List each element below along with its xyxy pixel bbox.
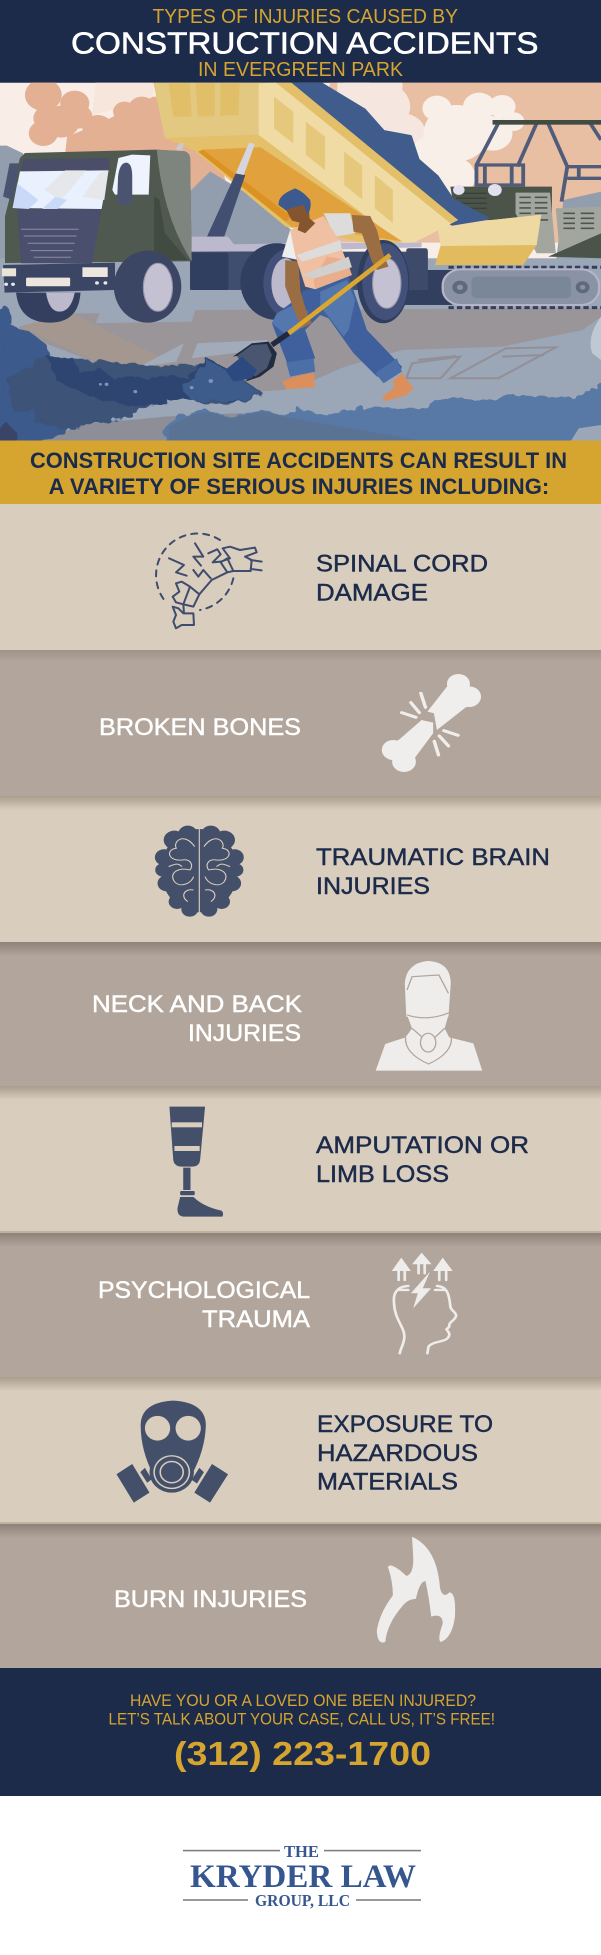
lower ground shadow [43,413,284,440]
panel: spinal cord damage: DAMAGE [316,580,428,606]
panel: neck and back injuries: INJURIES [188,1020,301,1047]
excavator [402,120,601,308]
gold subheading band [0,440,601,504]
panel: broken bones [0,650,601,796]
label: PSYCHOLOGICAL [98,1277,310,1304]
icon: spine [156,534,262,628]
label: BROKEN BONES [99,714,301,741]
foreground dirt: left [0,310,261,441]
clouds: left peach [25,79,230,197]
safety vest [290,216,352,289]
truck cab [2,150,192,293]
call to action banner: LET’S TALK ABOUT YOUR CASE, CALL US, IT’S FREE! [108,1710,495,1728]
label: TRAUMATIC BRAIN [316,844,550,871]
clouds: right sky [330,77,601,243]
logo: The Kryder Law Group: THE [284,1842,319,1861]
trousers [272,277,402,377]
icon: brain [155,826,244,917]
main title: CONSTRUCTION ACCIDENTS [71,26,538,60]
head [286,205,316,234]
dump truck bed [153,83,458,247]
worker with shovel [225,188,414,402]
ground shadow [19,308,601,393]
header banner [0,0,601,83]
icon: head with stress arrows [392,1253,456,1353]
call to action text: HAVE YOU OR A LOVED ONE BEEN INJURED? [130,1691,476,1710]
panel: amputation or limb loss: LIMB LOSS [316,1161,449,1188]
hydraulic ram [176,143,255,237]
panel: exposure to hazardous materials: HAZARDOUS [317,1440,478,1467]
call to action banner [0,1668,601,1796]
icon: broken bone [382,674,481,772]
ground [0,258,601,442]
panel: traumatic brain injuries [0,796,601,942]
label: SPINAL CORD [316,550,488,578]
illustration: worker shoveling by dump truck [0,77,601,447]
title line 3: IN EVERGREEN PARK [198,58,403,81]
panel: psychological trauma: TRAUMA [202,1306,310,1333]
panel: psychological trauma [0,1233,601,1377]
truck front wheels [16,251,181,323]
label: NECK AND BACK [92,991,302,1018]
title line 1: TYPES OF INJURIES CAUSED BY [152,5,458,28]
cuffs [286,358,315,377]
icon: prosthetic leg [169,1107,223,1217]
gold subheading band: CONSTRUCTION SITE ACCIDENTS CAN RESULT IN [30,448,567,473]
label: AMPUTATION OR [316,1132,529,1159]
panel: traumatic brain injuries: INJURIES [316,873,430,900]
panel: neck and back injuries [0,942,601,1086]
foreground dirt: right [165,383,601,447]
boots [282,373,315,389]
background hills [0,146,601,267]
panel: exposure to hazardous materials: MATERIALS [317,1468,458,1496]
dirt pile in truck bed [291,83,487,224]
phone number: (312) 223-1700 [174,1735,431,1772]
truck rear wheels [240,240,409,323]
panel: exposure to hazardous materials [0,1377,601,1524]
logo: The Kryder Law Group: GROUP, LLC [255,1891,350,1910]
truck chassis [190,237,428,290]
logo: The Kryder Law Group: KRYDER LAW [190,1859,416,1895]
shovel [233,342,277,382]
panel: spinal cord damage [0,504,601,650]
gold subheading band: A VARIETY OF SERIOUS INJURIES INCLUDING: [49,474,549,499]
icon: gas mask [117,1401,228,1503]
panel: amputation or limb loss [0,1086,601,1233]
label: EXPOSURE TO [317,1411,493,1438]
shirt [324,213,355,237]
logo: The Kryder Law Group [183,1842,421,1910]
arms [352,215,389,270]
icon: neck brace [376,961,482,1071]
panel: burn injuries [0,1524,601,1668]
icon: flame [377,1537,455,1643]
label: BURN INJURIES [114,1586,307,1613]
